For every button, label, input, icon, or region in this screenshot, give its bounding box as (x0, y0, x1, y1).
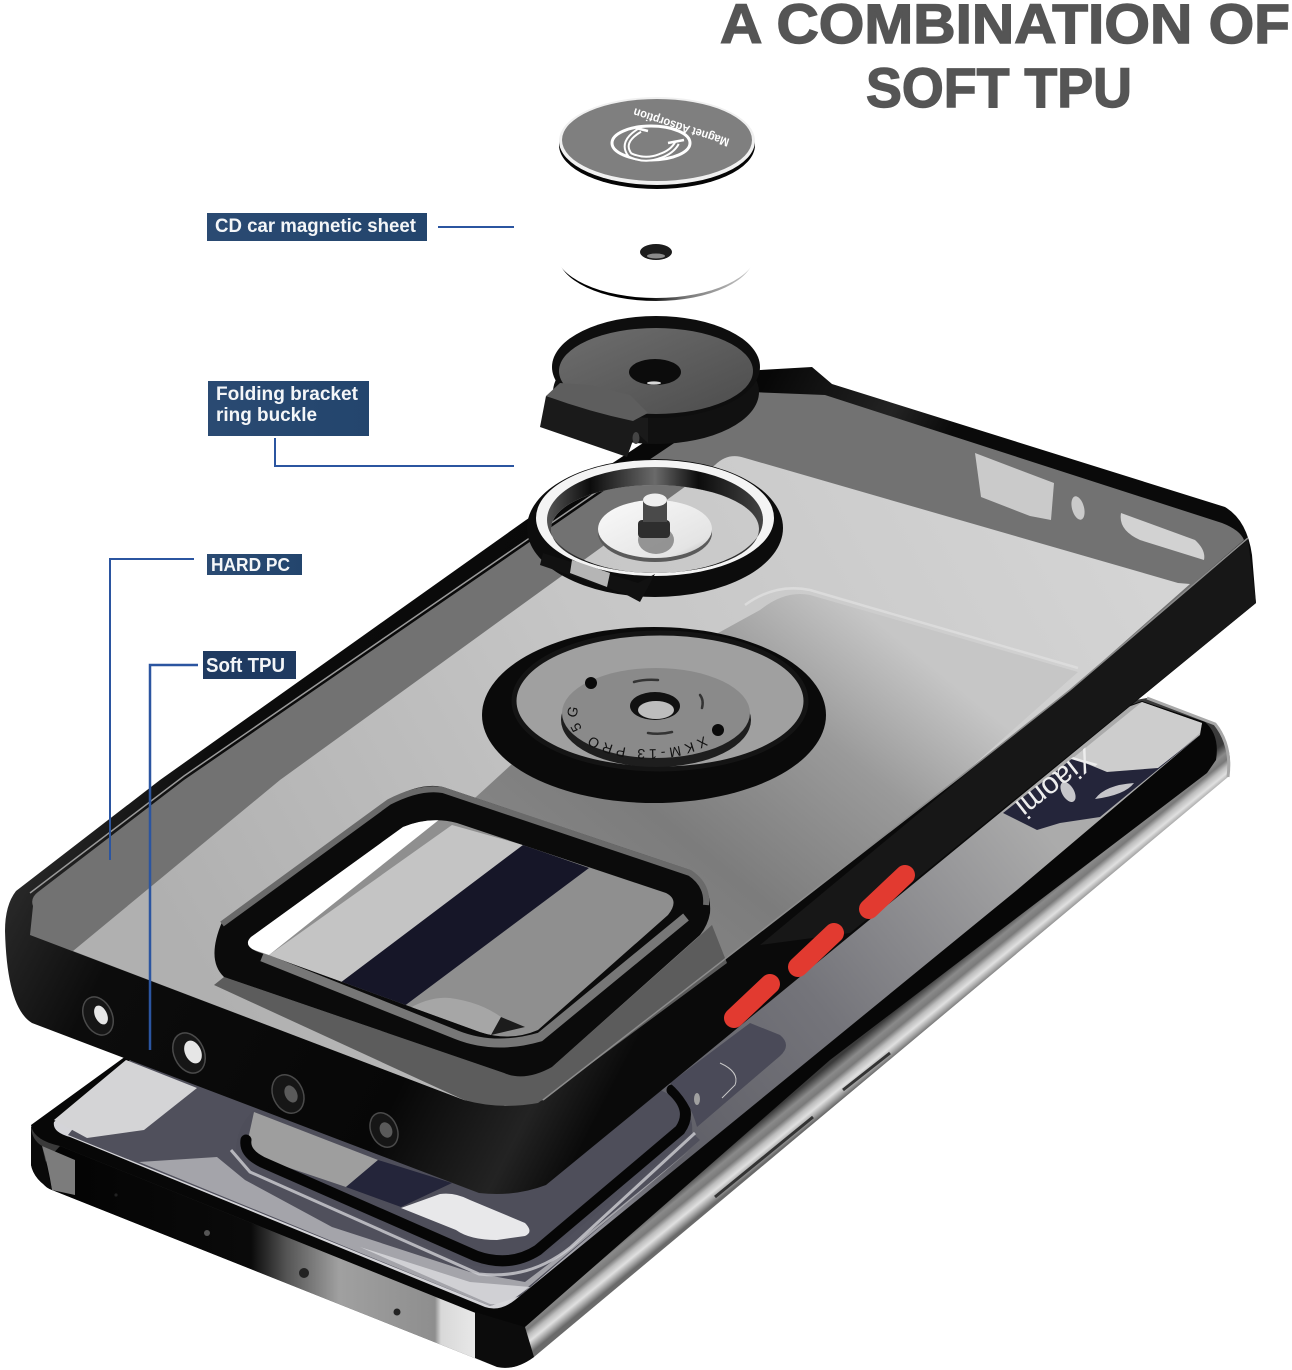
phone top-right edge highlight (1147, 698, 1229, 777)
icon: magnet in circle (612, 126, 690, 160)
phone wallpaper leaves (1057, 779, 1134, 805)
case outer black shell (5, 367, 1256, 1194)
bump navy reflection (346, 1160, 452, 1207)
label: Soft TPU: Soft TPU (206, 655, 285, 677)
holder inner recess (514, 633, 806, 769)
bump glass body (236, 1090, 692, 1267)
knob base rim (598, 504, 712, 562)
phone screen left base (68, 950, 700, 1306)
bracket side pin (632, 432, 640, 444)
bracket cup floor (559, 328, 753, 414)
holder disc screws (585, 677, 724, 736)
holder disc hole (630, 692, 680, 720)
plate black bottom edge (559, 101, 755, 189)
phone wallpaper top light (1073, 702, 1202, 772)
sheet hole highlight (647, 254, 665, 258)
line: hard PC (110, 559, 194, 860)
folding bracket (540, 316, 760, 457)
camera black frame (214, 786, 710, 1076)
plate grey face (562, 99, 752, 181)
case back rim highlight (30, 462, 640, 893)
phone left corner highlight (42, 1146, 75, 1195)
bump black border (246, 1090, 685, 1261)
phone wallpaper brand text: Xiaomi (1009, 741, 1102, 824)
wallpaper patch beside bump (670, 1023, 786, 1127)
camera grey bevel (262, 917, 686, 1043)
red button 2 (798, 933, 834, 967)
phone wallpaper dark shape (1003, 735, 1200, 830)
case lip strip under camera (214, 925, 727, 1106)
bracket tab top (546, 383, 648, 421)
case back middle darker zone (380, 594, 1078, 1106)
callout lines (110, 227, 514, 1050)
case right lip line (543, 538, 1248, 1100)
bump grey reflection (245, 1112, 378, 1187)
camera glass (248, 820, 674, 1036)
label: Folding bracket ring buckle: ring buckle (216, 405, 317, 426)
holder disc side (561, 673, 751, 767)
phone side face (38, 1146, 497, 1367)
phone left corner black (31, 1127, 52, 1190)
ring inner wall (547, 467, 763, 573)
ring black outer (527, 459, 783, 597)
white adhesive sheet (555, 204, 757, 301)
knob pin head (643, 494, 667, 506)
phone side pinholes (114, 1193, 401, 1316)
phone screen (54, 702, 1202, 1308)
case inner light outline (745, 588, 1078, 668)
label: CD car magnetic sheet (207, 213, 427, 241)
knob shadow (638, 526, 674, 554)
bump white reflection (401, 1194, 530, 1240)
bracket center hole (629, 359, 681, 385)
label: CD car magnetic sheet: CD car magnetic sheet (215, 216, 417, 237)
sheet white face (555, 204, 757, 298)
bracket tab side (540, 396, 648, 457)
title (720, 0, 1290, 119)
metal magnet plate (559, 97, 755, 189)
phone black rim (31, 701, 1217, 1328)
bracket rim (552, 316, 760, 418)
label: Folding bracket ring buckle (208, 381, 369, 436)
plate text: Magnet Adsorption (631, 105, 731, 149)
red button 1 (869, 875, 905, 909)
holder disc engraved text: XKM-13 PRO 5G (568, 707, 708, 759)
holder black ring (482, 627, 826, 803)
knob pin base (638, 520, 670, 538)
bump outer highlight (231, 1133, 695, 1275)
camera top grey rim (222, 789, 706, 924)
knob base (598, 500, 712, 558)
ring hinge (540, 553, 655, 602)
holder disc marks (634, 680, 703, 734)
case bottom holes (77, 992, 403, 1152)
bracket side wall (553, 340, 759, 444)
label: Folding bracket ring buckle: Folding bracket (216, 384, 359, 405)
line: soft TPU (150, 665, 198, 1050)
case side face (760, 540, 1256, 945)
phone screen light patch (54, 1060, 197, 1138)
phone screen bright sheen (360, 1247, 530, 1305)
phone silver body (31, 698, 1230, 1368)
phone screen lower sheen (139, 1150, 690, 1306)
magnetic ring holder (482, 627, 826, 803)
phone right corner black (475, 1312, 534, 1368)
line: folding bracket (275, 438, 514, 466)
phone side buttons (715, 1053, 890, 1197)
folding ring (527, 459, 783, 602)
title: SOFT TPU (866, 56, 1132, 119)
red button 3 (734, 984, 770, 1018)
phone camera bump (231, 1023, 786, 1275)
camera island (214, 786, 710, 1076)
phone case (5, 367, 1256, 1194)
holder disc top (562, 668, 750, 758)
sheet hole (640, 244, 672, 260)
plate silver rim (559, 97, 755, 185)
case camera cutouts top (975, 453, 1204, 560)
line: CD sheet (438, 226, 514, 228)
case translucent back dark band (30, 392, 1244, 1104)
label: HARD PC: HARD PC (211, 555, 290, 575)
ring silver band (536, 460, 774, 576)
sheet crescent edge (558, 209, 754, 301)
knob pin (643, 500, 667, 522)
case back light zone (73, 456, 1190, 1104)
